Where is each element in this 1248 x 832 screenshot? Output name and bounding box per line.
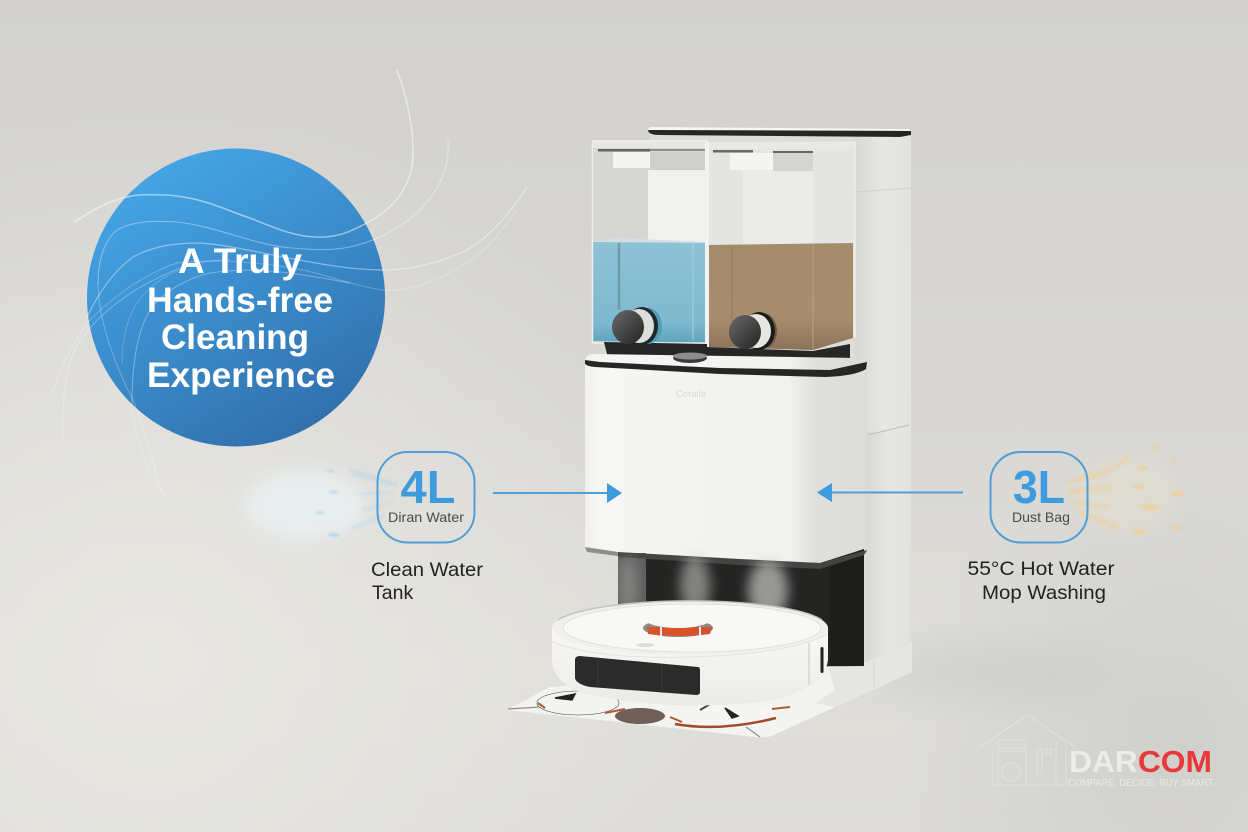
tower top cap bbox=[648, 127, 911, 137]
orange steam splash bbox=[1065, 446, 1186, 534]
title: Hands-free bbox=[147, 281, 333, 320]
title: Experience bbox=[147, 356, 335, 395]
logo: DARCOM: DARCOM bbox=[1069, 745, 1212, 779]
product: docking station and robot bbox=[507, 127, 1115, 738]
callout: dust bag capacity: Dust Bag bbox=[1012, 509, 1070, 525]
panel: blue title circle bbox=[87, 148, 385, 446]
robot lidar turret bbox=[643, 610, 713, 637]
tank tray bbox=[604, 342, 850, 366]
label: hot water mop washing: 55°C Hot Water bbox=[968, 558, 1115, 580]
title: A Truly bbox=[178, 242, 303, 281]
callout: dust bag capacity bbox=[990, 452, 1088, 542]
label: clean water tank bbox=[371, 559, 484, 604]
tank knobs bbox=[612, 307, 777, 350]
title: Cleaning bbox=[161, 318, 309, 357]
blue water splash bbox=[243, 467, 398, 541]
steam plumes bbox=[618, 555, 788, 620]
title bbox=[147, 242, 335, 395]
housing logo: Coraile bbox=[676, 389, 706, 400]
floor shadow bbox=[855, 648, 1115, 696]
robot vacuum bbox=[552, 601, 828, 706]
robot sensor window bbox=[575, 656, 700, 695]
logo: DARCOM bbox=[979, 715, 1215, 789]
tower column bbox=[650, 134, 911, 662]
callout: clean water capacity: Diran Water bbox=[388, 509, 464, 525]
callout: clean water capacity bbox=[378, 452, 474, 542]
logo: DARCOM: COMPARE. DECIDE. BUY SMART. bbox=[1068, 777, 1215, 789]
callout: clean water capacity: 4L bbox=[400, 461, 456, 513]
middle housing bbox=[585, 352, 867, 563]
label: clean water tank: Clean Water bbox=[371, 559, 484, 581]
swirling white air lines bbox=[52, 70, 527, 497]
label: hot water mop washing: Mop Washing bbox=[982, 582, 1106, 604]
clean water tank bbox=[592, 141, 707, 343]
arrow: dust bag to station bbox=[817, 483, 963, 502]
label: clean water tank: Tank bbox=[372, 582, 413, 604]
dirty water tank bbox=[707, 141, 855, 350]
arrow: clean water to station bbox=[493, 483, 622, 503]
mop pads bbox=[508, 691, 790, 737]
base plate bbox=[507, 642, 912, 738]
callout: dust bag capacity: 3L bbox=[1013, 461, 1065, 513]
label: hot water mop washing bbox=[968, 558, 1115, 604]
dark robot bay bbox=[585, 547, 867, 668]
icon: house with appliances bbox=[979, 715, 1075, 785]
